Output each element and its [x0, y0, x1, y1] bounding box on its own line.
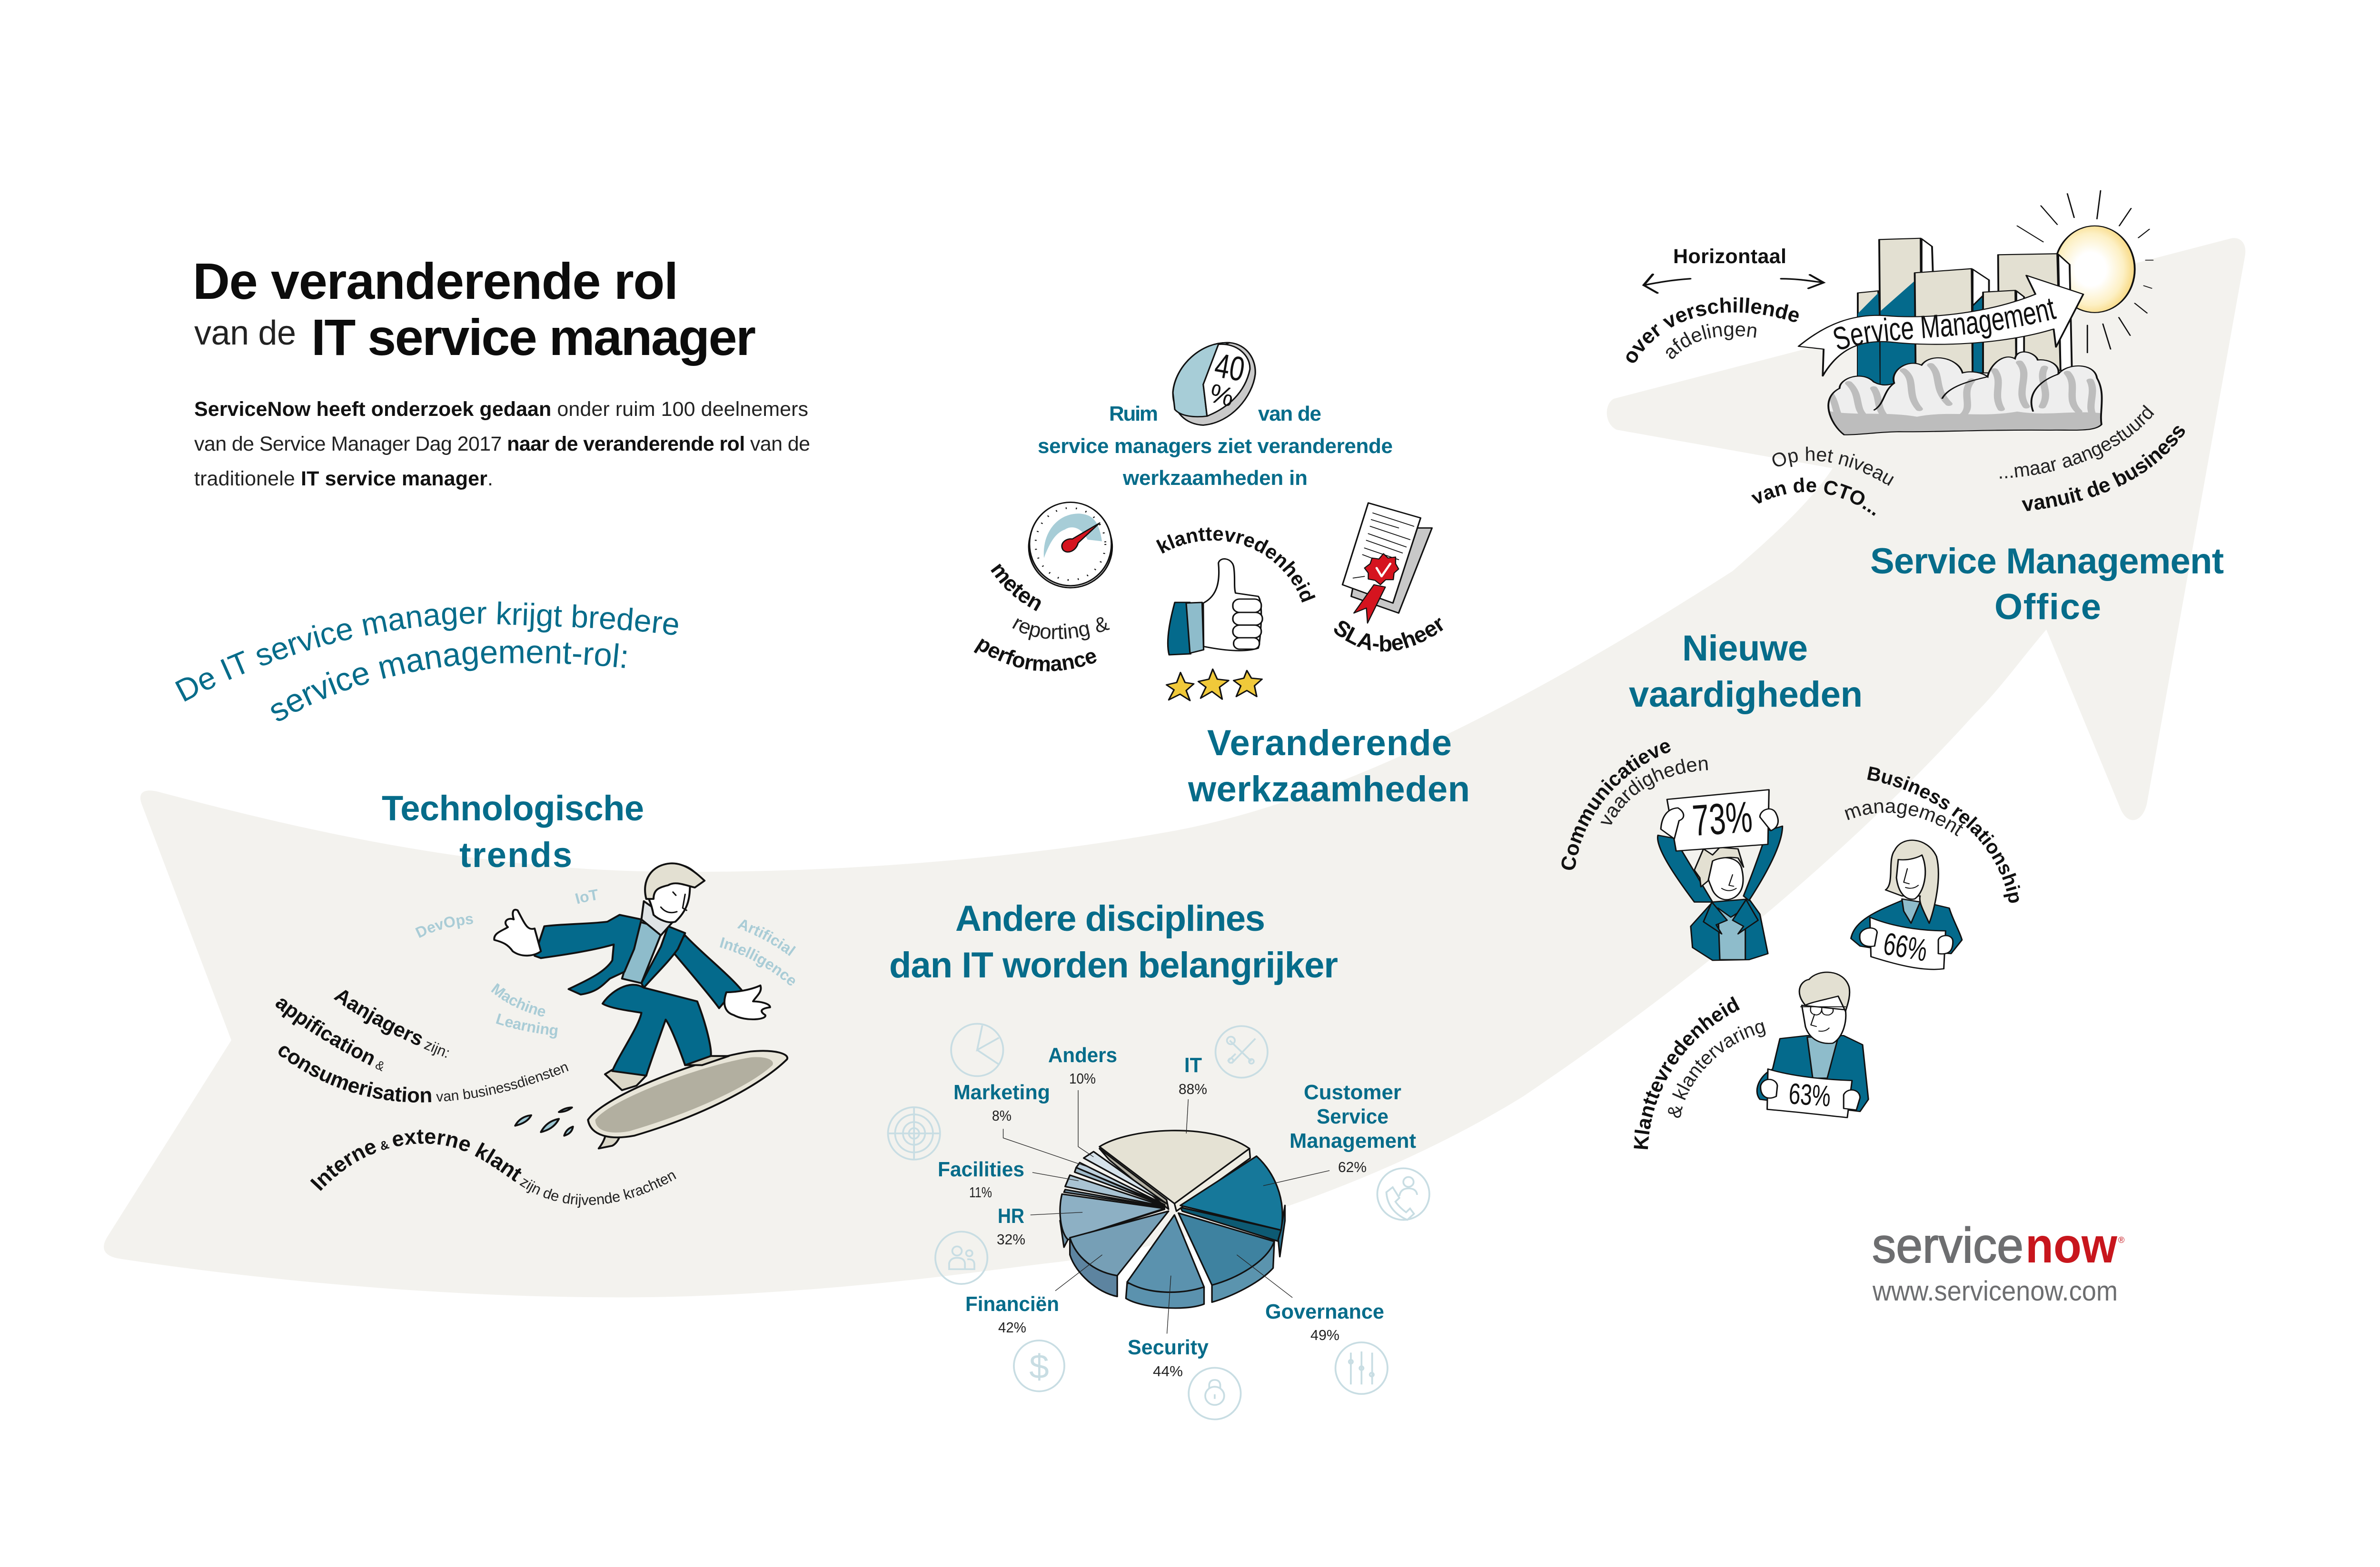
curved subtitle: De IT service manager krijgt bredere — [169, 595, 682, 709]
service management labels: afdelingen — [1658, 318, 1759, 364]
pie labels: Anders — [1048, 1044, 1117, 1067]
pie percentages: 10% — [1069, 1070, 1096, 1087]
trend labels — [413, 886, 801, 1039]
arrows — [1644, 275, 1824, 293]
skills labels: Business relationship — [1865, 762, 2027, 905]
illustration: buildings with banner and cloud: Service Management — [1829, 290, 2059, 358]
pie labels: Financiën — [965, 1292, 1059, 1316]
trend labels: Intelligence — [718, 934, 801, 989]
illustration: man with 73 percent sign: 73% — [1691, 793, 1754, 845]
heading: Veranderende werkzaamheden — [1188, 723, 1470, 809]
illustration: man with 73 percent sign — [1657, 790, 1783, 960]
trend labels: DevOps — [413, 910, 474, 941]
discipline icons — [888, 1024, 1429, 1419]
pie percentages: 62% — [1338, 1159, 1367, 1175]
heading: Nieuwe vaardigheden: vaardigheden — [1629, 674, 1863, 715]
drivers text: appification & — [271, 991, 387, 1074]
logo: servicenow: now — [2025, 1218, 2118, 1273]
task labels: performance — [972, 631, 1100, 676]
skills labels: Communicatieve — [1557, 734, 1674, 873]
panel: veranderende werkzaamheden intro — [1038, 402, 1393, 490]
pie labels — [938, 1044, 1416, 1359]
pie labels: Management — [1289, 1129, 1416, 1153]
task labels: SLA-beheer — [1329, 611, 1449, 656]
logo: servicenow: service — [1872, 1218, 2023, 1273]
heading: Service Management Office — [1870, 541, 2224, 627]
icon: sliders — [1336, 1342, 1388, 1394]
service management labels: Horizontaal — [1673, 245, 1786, 268]
skills labels — [1557, 734, 2027, 1151]
heading: Andere disciplines — [889, 898, 1338, 986]
skills labels: management — [1841, 795, 1968, 840]
heading: Nieuwe vaardigheden: Nieuwe — [1682, 628, 1808, 669]
heading: Veranderende werkzaamheden: Veranderende — [1207, 723, 1452, 763]
heading: Service Management Office: Service Management — [1870, 541, 2224, 581]
panel: veranderende werkzaamheden intro: service managers ziet veranderende — [1038, 434, 1393, 458]
icon: dollar — [1014, 1340, 1064, 1391]
heading: Technologische trends — [382, 788, 644, 875]
cloud — [1817, 352, 2108, 437]
surfer body — [494, 863, 770, 1090]
water drops — [515, 1107, 573, 1136]
illustration: man with 63 percent sign: 63% — [1788, 1077, 1832, 1113]
logo: servicenow — [1872, 1218, 2124, 1273]
icon: gauge — [1029, 502, 1112, 588]
task labels: meten — [986, 557, 1048, 616]
skills labels: & klantervaring — [1663, 1015, 1768, 1120]
pie chart: disciplines — [1003, 1090, 1329, 1334]
intro text block: ServiceNow heeft onderzoek gedaan onder ruim 100 deelnemers — [194, 398, 808, 421]
pie percentages: 88% — [1179, 1081, 1207, 1097]
heading: Technologische trends: Technologische — [382, 788, 644, 828]
heading: Andere disciplines: dan IT worden belangrijker — [889, 945, 1338, 986]
task labels: klanttevredenheid — [1153, 522, 1319, 605]
service management labels: ...maar aangestuurd — [1997, 401, 2158, 483]
top wedges — [1084, 1152, 1167, 1203]
panel: veranderende werkzaamheden intro: werkzaamheden in — [1122, 466, 1308, 490]
illustration: surfer — [494, 863, 787, 1148]
icon: SLA certificate — [1342, 503, 1432, 623]
service management labels: over verschillende — [1618, 294, 1803, 368]
icon: 40 percent pie: 40 — [1212, 346, 1248, 389]
pie labels: Marketing — [953, 1081, 1050, 1104]
icon: 40 percent pie: % — [1207, 378, 1237, 413]
icon: phone and person — [1377, 1168, 1429, 1220]
illustration: man with 63 percent sign — [1757, 972, 1868, 1118]
pie labels: HR — [998, 1204, 1024, 1228]
surfboard — [588, 1051, 787, 1148]
pie percentages: 8% — [992, 1107, 1012, 1124]
leader lines — [1003, 1090, 1329, 1334]
service management labels — [1618, 245, 2191, 520]
pie percentages: 44% — [1153, 1363, 1183, 1380]
trend labels: Artificial — [736, 915, 798, 959]
drivers text — [271, 984, 679, 1208]
trend labels: Machine — [488, 980, 548, 1020]
background arrow — [104, 238, 2245, 1297]
drivers text: consumerisation van businessdiensten — [273, 1038, 571, 1107]
pie percentages: 11% — [969, 1184, 992, 1201]
logo: servicenow: ® — [2118, 1235, 2124, 1245]
illustration: sun — [2017, 190, 2153, 353]
illustration: woman with 66 percent sign — [1851, 840, 1962, 969]
pie labels: Service — [1317, 1105, 1388, 1128]
icon: lock — [1189, 1368, 1241, 1419]
heading: Veranderende werkzaamheden: werkzaamheden — [1188, 769, 1470, 809]
task labels — [972, 522, 1449, 676]
icon: target — [888, 1107, 941, 1160]
icon: people — [935, 1232, 987, 1284]
service management labels: van de CTO... — [1748, 474, 1885, 520]
intro text block: traditionele IT service manager. — [194, 467, 493, 490]
icon: thumbs up with stars — [1167, 559, 1262, 700]
pie percentages: 32% — [997, 1231, 1025, 1248]
curved subtitle: service management-rol: — [262, 633, 631, 729]
illustration: woman with 66 percent sign: 66% — [1881, 926, 1930, 968]
service management labels: Op het niveau — [1768, 443, 1899, 490]
buildings — [1858, 238, 2072, 386]
intro text block — [194, 398, 810, 490]
heading: Service Management Office: Office — [1994, 587, 2101, 627]
trend labels: Learning — [494, 1010, 559, 1039]
title — [193, 252, 756, 366]
skills labels: Klanttevredenheid — [1630, 993, 1743, 1151]
icon: marketing pie — [951, 1024, 1003, 1076]
stars — [1167, 669, 1262, 700]
banner — [1798, 276, 2083, 376]
title: IT service manager — [311, 308, 756, 366]
service management labels: vanuit de business — [2021, 419, 2191, 516]
pie percentages: 49% — [1310, 1327, 1339, 1343]
panel: veranderende werkzaamheden intro: Ruim — [1109, 402, 1158, 425]
icon: dollar: $ — [1029, 1348, 1049, 1386]
trend labels: IoT — [573, 886, 600, 907]
intro text block: van de Service Manager Dag 2017 naar de veranderende rol van de — [194, 433, 810, 455]
pie labels: Governance — [1265, 1300, 1384, 1323]
heading: Andere disciplines: Andere disciplines — [955, 898, 1265, 939]
icon: 40 percent pie — [1173, 343, 1255, 425]
pie percentages: 42% — [998, 1319, 1026, 1336]
panel: veranderende werkzaamheden intro: van de — [1258, 402, 1321, 425]
heading: Technologische trends: trends — [459, 835, 572, 875]
website url: www.servicenow.com — [1872, 1276, 2118, 1307]
icon: tools — [1216, 1026, 1268, 1078]
pie percentages — [969, 1070, 1367, 1380]
side faces — [1060, 1209, 1165, 1247]
pie labels: Facilities — [938, 1158, 1024, 1181]
pie labels: IT — [1184, 1054, 1202, 1077]
heading: Nieuwe vaardigheden — [1629, 628, 1863, 715]
pie labels: Security — [1128, 1336, 1209, 1359]
drivers text: Interne & externe klant zijn de drijvende krachten — [306, 1124, 679, 1208]
pie labels: Customer — [1304, 1081, 1401, 1104]
drivers text: Aanjagers zijn: — [330, 984, 452, 1062]
title: De veranderende rol — [193, 252, 678, 310]
skills labels: vaardigheden — [1594, 752, 1709, 830]
title: van de — [194, 314, 296, 352]
task labels: reporting & — [1009, 611, 1111, 644]
illustration: buildings with banner and cloud — [1644, 238, 2108, 437]
